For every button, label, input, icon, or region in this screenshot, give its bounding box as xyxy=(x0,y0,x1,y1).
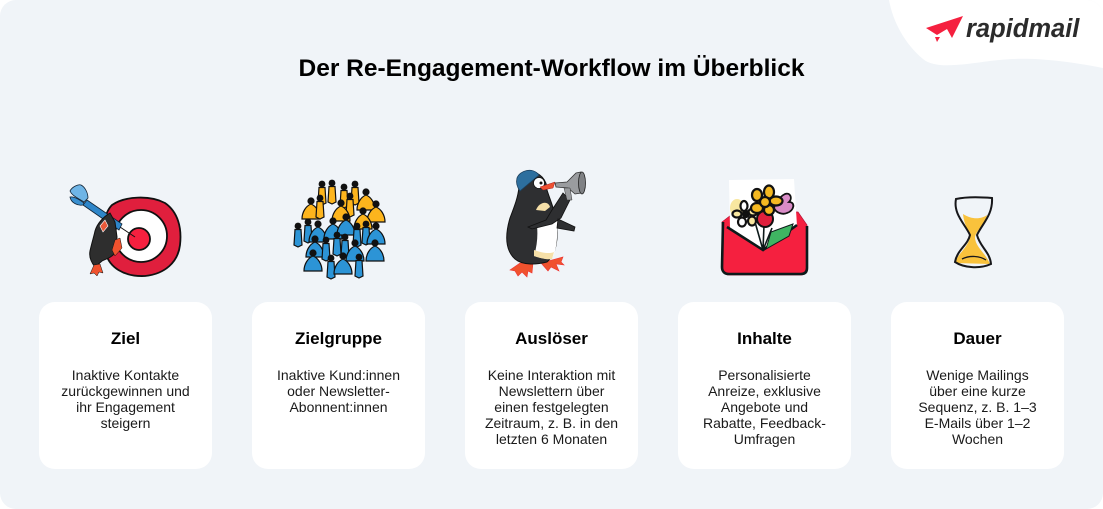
icon: crowd of people xyxy=(293,180,386,280)
logo area: white blob xyxy=(889,0,1103,68)
text: Auslöser: Keine Interaktion mit xyxy=(488,367,615,383)
text: Inhalte: Umfragen xyxy=(734,431,795,447)
icon: hourglass xyxy=(954,196,994,268)
title: Der Re-Engagement-Workflow im Überblick xyxy=(298,55,804,82)
text: Dauer xyxy=(918,367,1037,447)
logo icon: paper plane xyxy=(926,16,963,42)
heading: Zielgruppe: Zielgruppe xyxy=(295,329,382,348)
panel: Ziel xyxy=(39,302,212,469)
text: Dauer: Wochen xyxy=(952,431,1003,447)
heading: Auslöser: Auslöser xyxy=(515,329,588,348)
text: Inhalte: Personalisierte xyxy=(718,367,811,383)
text: Ziel xyxy=(61,367,190,431)
text: Inhalte: Angebote und xyxy=(721,399,808,415)
text: Ziel: Inaktive Kontakte xyxy=(72,367,179,383)
heading: Ziel: Ziel xyxy=(111,329,140,348)
panel: Auslöser xyxy=(465,302,638,469)
text: Ziel: ihr Engagement xyxy=(76,399,175,415)
heading: Dauer: Dauer xyxy=(953,329,1002,348)
text: Auslöser: Zeitraum, z. B. in den xyxy=(485,415,618,431)
text: Auslöser: Newslettern über xyxy=(499,383,604,399)
text: Zielgruppe: Inaktive Kund:innen xyxy=(277,367,400,383)
text: Dauer: Sequenz, z. B. 1–3 xyxy=(918,399,1037,415)
logo wordmark: rapidmail xyxy=(966,15,1079,43)
text: Auslöser: einen festgelegten xyxy=(494,399,609,415)
icon: penguin with dart and target xyxy=(70,184,182,277)
text: Auslöser: letzten 6 Monaten xyxy=(496,431,607,447)
text: Zielgruppe xyxy=(277,367,400,415)
icon: envelope with flowers xyxy=(720,179,808,276)
text: Dauer: E-Mails über 1–2 xyxy=(925,415,1030,431)
text: Zielgruppe: Abonnent:innen xyxy=(289,399,388,415)
text: Dauer: Wenige Mailings xyxy=(926,367,1029,383)
text: Auslöser xyxy=(485,367,618,447)
panel: Dauer xyxy=(891,302,1064,469)
text: Ziel: zurückgewinnen und xyxy=(61,383,190,399)
heading: Inhalte: Inhalte xyxy=(737,329,792,348)
text: Inhalte xyxy=(703,367,826,447)
text: Inhalte: Anreize, exklusive xyxy=(708,383,821,399)
logo: rapidmail xyxy=(926,15,1080,43)
text: Dauer: über eine kurze xyxy=(929,383,1026,399)
text: Inhalte: Rabatte, Feedback- xyxy=(703,415,826,431)
icon: penguin with megaphone xyxy=(506,170,586,278)
panel: Inhalte xyxy=(678,302,851,469)
text: Ziel: steigern xyxy=(101,415,150,431)
text: Zielgruppe: oder Newsletter- xyxy=(287,383,390,399)
panel: Zielgruppe xyxy=(252,302,425,469)
